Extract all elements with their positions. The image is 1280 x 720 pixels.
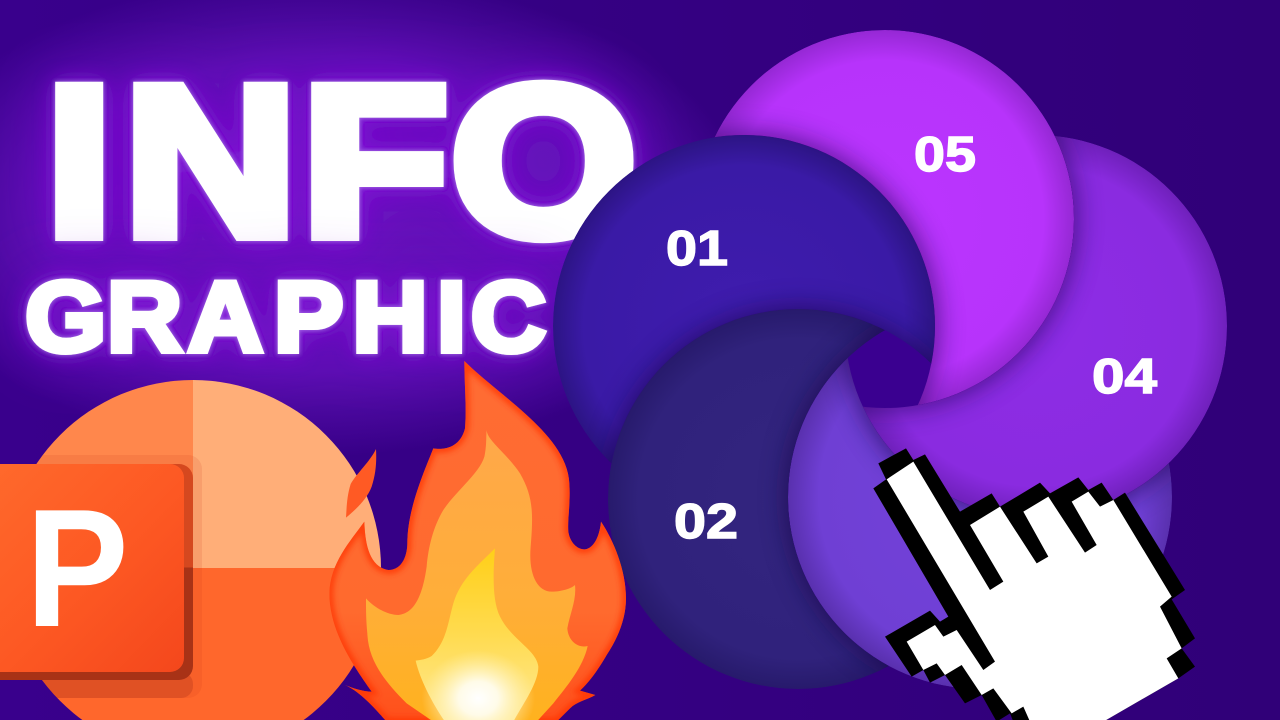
- segment 04: [863, 136, 1227, 506]
- flame outer: [330, 361, 626, 720]
- logo square: [0, 464, 184, 672]
- title: INFO: INFO: [46, 42, 637, 281]
- cursor outline: [873, 448, 1195, 720]
- flame yellow layer: [416, 548, 538, 720]
- label 01: 01: [666, 222, 728, 276]
- label 04: 04: [1092, 350, 1157, 404]
- icon: flame: [330, 361, 626, 720]
- segment 05: [714, 30, 1074, 405]
- flame spark: [346, 449, 376, 518]
- cursor fill: [887, 462, 1182, 720]
- subtitle: GRAPHIC: GRAPHIC: [25, 261, 546, 372]
- flame orange layer: [366, 430, 588, 720]
- label 05: 05: [914, 128, 976, 182]
- icon: pixel hand cursor: [873, 448, 1195, 720]
- spiral diagram of five overlapping circles: [550, 27, 1230, 692]
- segment 03: [788, 358, 1172, 687]
- icon: PowerPoint logo: [0, 375, 390, 720]
- flame core glow: [422, 650, 535, 720]
- segment 02: [608, 309, 888, 689]
- logo letter P: P: [26, 475, 129, 662]
- logo circle quadrants: [36, 380, 381, 720]
- label 02: 02: [674, 495, 738, 549]
- segment 01: [553, 135, 935, 463]
- logo square shadow: [0, 464, 193, 680]
